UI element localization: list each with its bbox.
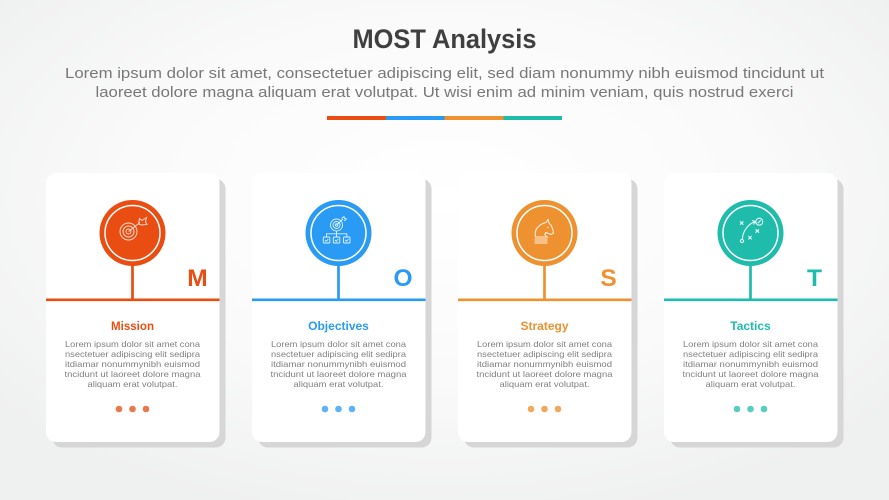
body text: objectives: tncidunt ut laoreet dolore magna [270, 369, 407, 379]
body text: strategy: Lorem ipsum dolor sit amet cona [477, 339, 612, 349]
dots: objectives [322, 406, 355, 412]
heading: mission: Mission [111, 319, 154, 333]
body text: objectives: Lorem ipsum dolor sit amet cona [271, 339, 406, 349]
body text: strategy: aliquam erat volutpat. [500, 379, 590, 389]
icon: chess knight [512, 200, 578, 266]
icon: target above org chart [306, 200, 372, 266]
dots: mission [116, 406, 149, 412]
dots: strategy [528, 406, 561, 412]
title: MOST Analysis [352, 24, 536, 54]
icon: target with arrow [100, 200, 166, 266]
letter: T: T [807, 265, 822, 292]
body text: mission: Lorem ipsum dolor sit amet cona [65, 339, 200, 349]
body text: tactics: itdiamar nonummynibh euismod [683, 359, 818, 369]
letter: M: M [187, 265, 208, 292]
body text: mission [64, 339, 201, 389]
divider line and stem: tactics [664, 262, 838, 300]
body text: objectives [270, 339, 407, 389]
dots: tactics [734, 406, 767, 412]
body text: objectives: aliquam erat volutpat. [294, 379, 384, 389]
subtitle text block [65, 65, 825, 101]
body text: tactics [682, 339, 819, 389]
body text: tactics: aliquam erat volutpat. [706, 379, 796, 389]
letter: S: S [600, 265, 617, 292]
divider line and stem: strategy [458, 262, 632, 300]
body text: strategy: itdiamar nonummynibh euismod [477, 359, 612, 369]
body text: mission: itdiamar nonummynibh euismod [65, 359, 200, 369]
body text: tactics: tncidunt ut laoreet dolore magna [682, 369, 819, 379]
letter: O: O [393, 265, 413, 292]
body text: tactics: nsectetuer adipiscing elit sedipra [683, 349, 818, 359]
body text: mission: aliquam erat volutpat. [88, 379, 178, 389]
divider line and stem: objectives [252, 262, 426, 300]
body text: strategy: nsectetuer adipiscing elit sedipra [477, 349, 612, 359]
body text: strategy: tncidunt ut laoreet dolore magna [476, 369, 613, 379]
panel: mission [46, 173, 226, 448]
heading: objectives: Objectives [308, 319, 369, 333]
body text: objectives: itdiamar nonummynibh euismod [271, 359, 406, 369]
subtitle text block: Lorem ipsum dolor sit amet, consectetuer adipiscing elit, sed diam nonummy nibh euismod tincidunt ut [65, 65, 825, 82]
body text: mission: tncidunt ut laoreet dolore magna [64, 369, 201, 379]
icon: tactics play diagram [718, 200, 784, 266]
panel: strategy [458, 173, 638, 448]
divider line and stem: mission [46, 262, 220, 300]
heading: tactics: Tactics [730, 319, 771, 333]
panel: objectives [252, 173, 432, 448]
body text: objectives: nsectetuer adipiscing elit sedipra [271, 349, 406, 359]
heading: strategy: Strategy [520, 319, 569, 333]
panel: tactics [664, 173, 844, 448]
subtitle text block: laoreet dolore magna aliquam erat volutpat. Ut wisi enim ad minim veniam, quis nostrud exerci [96, 84, 793, 101]
body text: tactics: Lorem ipsum dolor sit amet cona [683, 339, 818, 349]
divider: four colour bar [327, 116, 562, 120]
body text: strategy [476, 339, 613, 389]
body text: mission: nsectetuer adipiscing elit sedipra [65, 349, 200, 359]
